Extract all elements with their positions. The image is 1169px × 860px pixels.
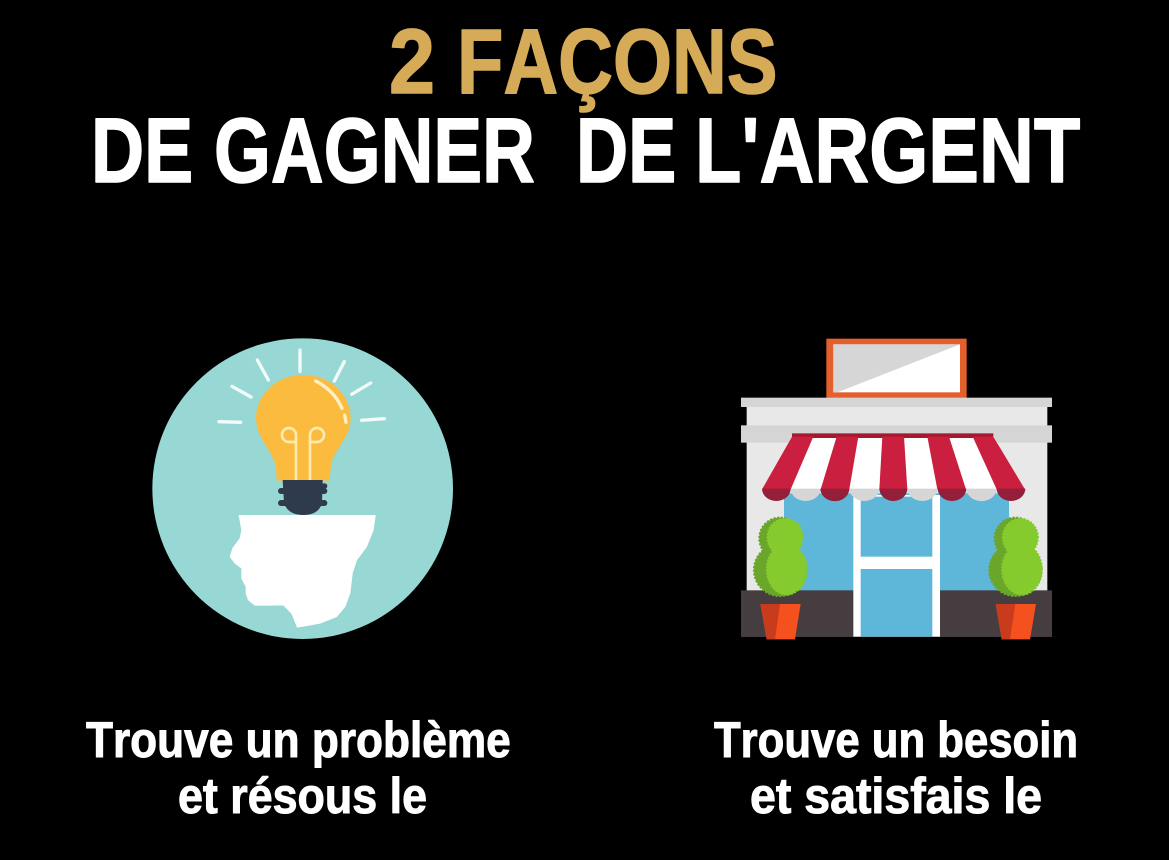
caption left line 1: Trouve un problème [86,711,511,768]
bulb base [278,480,327,515]
caption: need [714,711,1078,824]
title line 2: L'ARGENT [695,99,1080,202]
light rays [219,350,384,422]
caption right line 2: et satisfais le [750,768,1042,824]
plinth [741,590,1052,637]
bulb highlight [316,381,346,422]
caption: problem [86,711,511,825]
right plant [989,518,1042,639]
head silhouette [230,515,375,627]
teal circle [152,338,453,639]
icon: shop front [741,339,1052,639]
title line 1: 2 [389,10,435,113]
title line 1: FAÇONS [457,10,777,113]
caption right line 1: Trouve un besoin [714,711,1078,768]
bulb glass [256,375,351,481]
roof ledges [741,398,1052,443]
icon: light bulb over head [152,338,453,639]
shop sign [826,339,967,398]
title line 2 [91,99,1080,202]
windows [784,493,1009,593]
title line 2: DE [576,99,676,202]
door [853,495,940,637]
caption left line 2: et résous le [178,769,427,825]
building wall [747,406,1047,593]
awning [762,433,1025,501]
title line 2: DE [91,99,193,202]
title line 2: GAGNER [214,99,535,202]
left plant [754,518,807,639]
filament [282,428,324,480]
title [91,10,1080,202]
